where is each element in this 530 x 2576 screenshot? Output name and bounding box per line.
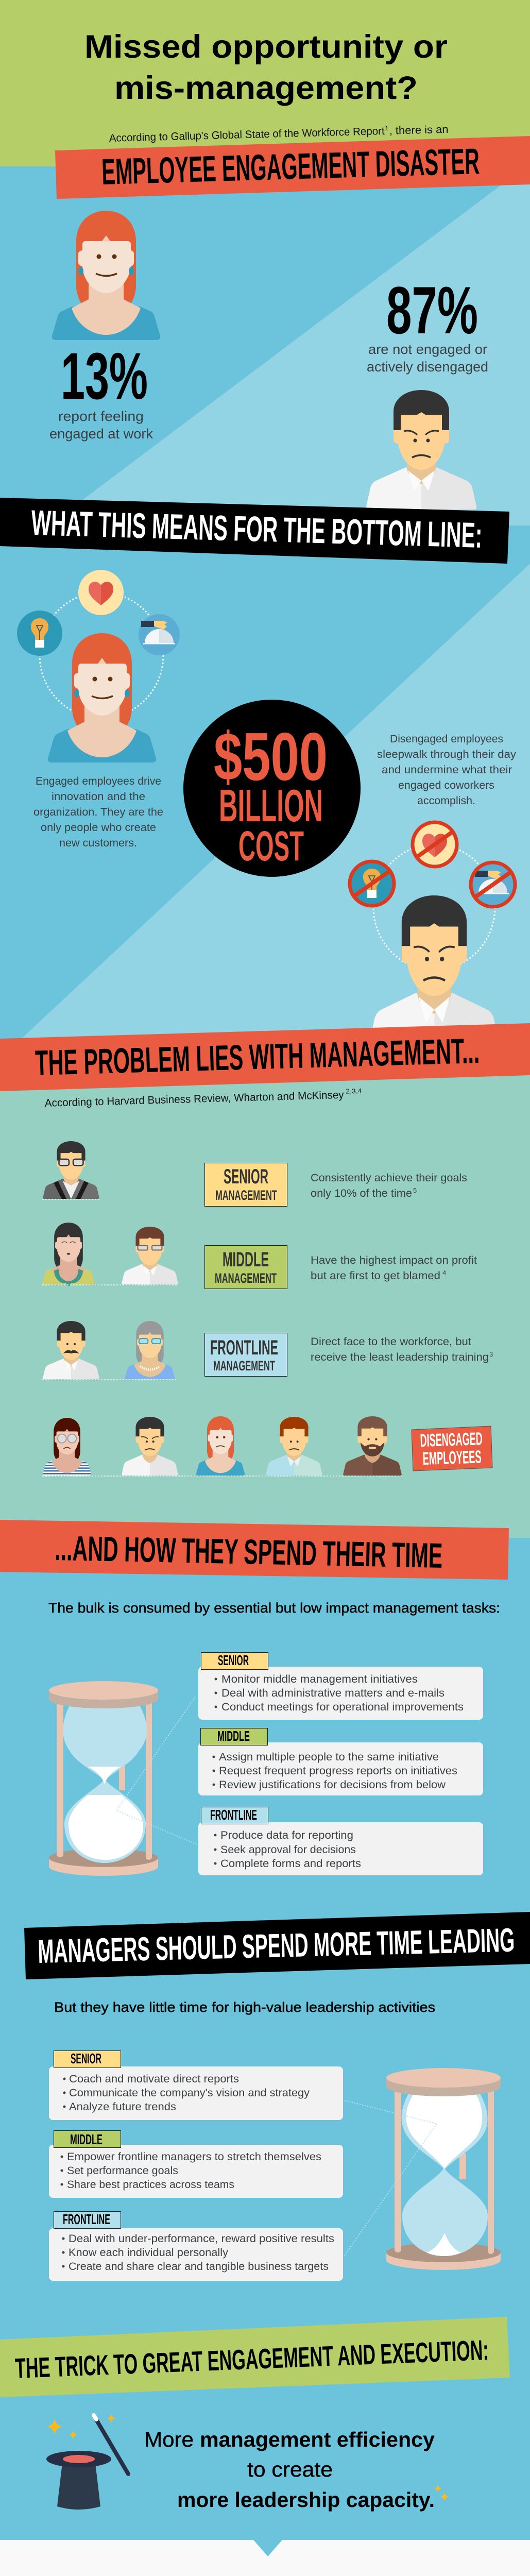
text: frontline management: 3	[489, 1350, 493, 1358]
card: senior leadership	[49, 2050, 343, 2120]
card: frontline tasks: Seek approval for decisions	[220, 1844, 356, 1856]
card: senior tasks: Monitor middle management initiatives	[221, 1673, 418, 1685]
card: frontline leadership: Deal with under-performance, reward positive results	[69, 2233, 334, 2245]
text: engaged employees	[33, 775, 163, 849]
disengaged icons ring	[349, 822, 516, 970]
label: frontline management	[205, 1333, 287, 1377]
person: disengaged man	[122, 1417, 178, 1476]
card: middle tasks: Review justifications for decisions from below	[219, 1779, 446, 1791]
label: middle management: MIDDLE	[223, 1248, 269, 1271]
card: senior leadership: Analyze future trends	[69, 2101, 176, 2113]
card: frontline leadership: Create and share clear and tangible business targets	[69, 2261, 329, 2273]
engaged woman with icons	[48, 633, 156, 762]
subhead: leadership activities: But they have little time for high-value leadership activities	[54, 1999, 435, 2015]
label: frontline management: FRONTLINE	[210, 1336, 278, 1359]
icon: cloche	[139, 614, 180, 655]
source line: management: According to Harvard Business Review, Wharton and McKinsey	[44, 1089, 344, 1109]
stat: 87%	[367, 273, 488, 375]
card: middle tasks: Request frequent progress reports on initiatives	[219, 1765, 457, 1777]
text: engaged employees: innovation and the	[52, 790, 145, 803]
text: disengaged employees: accomplish.	[417, 794, 475, 807]
card: frontline tasks: FRONTLINE	[210, 1807, 257, 1823]
title: Missed opportunity or	[84, 29, 448, 65]
text: engaged employees: Engaged employees drive	[36, 775, 161, 787]
callout: $500 billion cost: $500	[214, 719, 328, 794]
intro text: According to Gallup's Global State of the Workforce Report	[109, 125, 385, 144]
title	[84, 29, 448, 106]
text: engaged employees: organization. They are the	[33, 806, 163, 818]
stat: 87%: are not engaged or	[368, 342, 487, 357]
closing statement: more leadership capacity.	[177, 2488, 435, 2512]
closing statement	[144, 2428, 449, 2512]
label: senior management	[205, 1163, 287, 1207]
text: frontline management: receive the least leadership training	[311, 1351, 489, 1363]
person: disengaged bearded man	[343, 1416, 402, 1476]
card: frontline tasks: Complete forms and reports	[220, 1858, 361, 1870]
callout: $500 billion cost: BILLION	[219, 780, 323, 831]
icon: crossed heart	[412, 822, 457, 867]
callout: $500 billion cost	[183, 700, 361, 877]
card: frontline leadership	[49, 2211, 343, 2281]
card: middle leadership: MIDDLE	[70, 2131, 102, 2147]
stat: 13%: engaged at work	[49, 426, 153, 442]
text: disengaged employees: sleepwalk through their day	[377, 748, 516, 760]
label: senior management: SENIOR	[224, 1165, 268, 1188]
person: frontline manager man	[43, 1321, 99, 1379]
callout: $500 billion cost: COST	[238, 823, 304, 870]
stat: 87%: actively disengaged	[367, 359, 488, 375]
card: senior tasks: SENIOR	[218, 1652, 249, 1668]
card: senior tasks	[198, 1652, 483, 1720]
dotted connectors	[344, 2100, 437, 2256]
text: middle management: 4	[442, 1269, 446, 1277]
stat: 13%	[49, 340, 153, 442]
card: senior tasks: Deal with administrative matters and e-mails	[221, 1687, 444, 1699]
icon: heart	[78, 570, 124, 615]
person: middle manager man	[122, 1227, 178, 1284]
label: middle management	[205, 1246, 287, 1289]
footer pointer	[253, 2540, 282, 2556]
text: disengaged employees: and undermine what their	[382, 764, 512, 776]
disengaged man figure	[366, 390, 476, 510]
icon: light bulb	[17, 611, 62, 656]
card: frontline leadership: Know each individual personally	[69, 2247, 229, 2259]
card: frontline tasks	[198, 1807, 483, 1875]
card: frontline leadership: FRONTLINE	[63, 2211, 110, 2227]
tag: disengaged employees	[412, 1426, 492, 1471]
label: frontline management: MANAGEMENT	[213, 1358, 275, 1374]
text: senior management	[311, 1172, 467, 1199]
text: disengaged employees: engaged coworkers	[398, 779, 494, 791]
intro text: , there is an	[389, 124, 449, 137]
text: senior management: 5	[413, 1187, 417, 1194]
text: engaged employees: new customers.	[59, 837, 137, 849]
person: frontline manager woman	[125, 1321, 175, 1379]
card: senior leadership: SENIOR	[71, 2050, 101, 2066]
text: disengaged employees	[377, 733, 516, 807]
text: middle management: Have the highest impact on profit	[311, 1254, 477, 1266]
card: middle leadership: Share best practices across teams	[67, 2179, 234, 2191]
text: disengaged employees: Disengaged employees	[390, 733, 503, 745]
text: engaged employees: only people who create	[41, 821, 156, 834]
intro text: 1	[385, 125, 389, 132]
card: middle tasks: Assign multiple people to the same initiative	[219, 1751, 439, 1763]
icon: crossed cloche	[470, 862, 516, 907]
stat: 13%: 13%	[61, 340, 148, 413]
text: senior management: Consistently achieve their goals	[311, 1172, 467, 1184]
card: senior tasks: Conduct meetings for operational improvements	[221, 1701, 464, 1713]
subhead: low impact tasks: The bulk is consumed by essential but low impact management tasks:	[48, 1600, 500, 1616]
dotted floor lines	[42, 1199, 402, 1476]
stat: 87%: 87%	[386, 273, 478, 348]
person: disengaged red-haired woman	[196, 1416, 245, 1476]
person: senior manager	[43, 1141, 99, 1199]
card: middle leadership: Set performance goals	[67, 2165, 178, 2177]
label: middle management: MANAGEMENT	[215, 1270, 277, 1286]
label: senior management: MANAGEMENT	[215, 1188, 277, 1203]
engaged icons ring	[17, 570, 180, 718]
text: middle management	[311, 1254, 477, 1282]
text: frontline management: Direct face to the workforce, but	[311, 1335, 471, 1348]
dotted connectors	[116, 1697, 198, 1845]
person: middle manager woman	[43, 1223, 94, 1286]
text: senior management: only 10% of the time	[311, 1187, 412, 1199]
engaged woman figure	[52, 211, 160, 340]
person: disengaged man in blue	[266, 1417, 322, 1476]
card: middle leadership: Empower frontline managers to stretch themselves	[67, 2151, 321, 2163]
hourglass: sand on top	[386, 2068, 501, 2270]
card: frontline tasks: Produce data for reporting	[220, 1829, 353, 1841]
closing statement: management efficiency	[200, 2428, 435, 2451]
card: middle tasks	[198, 1728, 483, 1795]
card: senior leadership: Communicate the company's vision and strategy	[69, 2087, 310, 2099]
text: frontline management	[311, 1335, 493, 1363]
icon: crossed bulb	[349, 861, 395, 906]
closing statement: More	[144, 2428, 194, 2451]
hourglass: sand on bottom	[49, 1681, 158, 1876]
text: middle management: but are first to get blamed	[311, 1269, 440, 1282]
title: mis-management?	[114, 70, 418, 106]
stat: 13%: report feeling	[58, 409, 144, 424]
card: middle tasks: MIDDLE	[217, 1728, 250, 1744]
card: middle leadership	[49, 2131, 343, 2198]
person: disengaged woman with glasses	[43, 1418, 91, 1476]
icon: magic hat and wand	[46, 2414, 128, 2510]
disengaged man with crossed icons	[370, 895, 499, 1046]
card: senior leadership: Coach and motivate direct reports	[69, 2073, 239, 2085]
closing statement: to create	[247, 2458, 333, 2481]
source line: management: 2,3,4	[346, 1087, 362, 1095]
